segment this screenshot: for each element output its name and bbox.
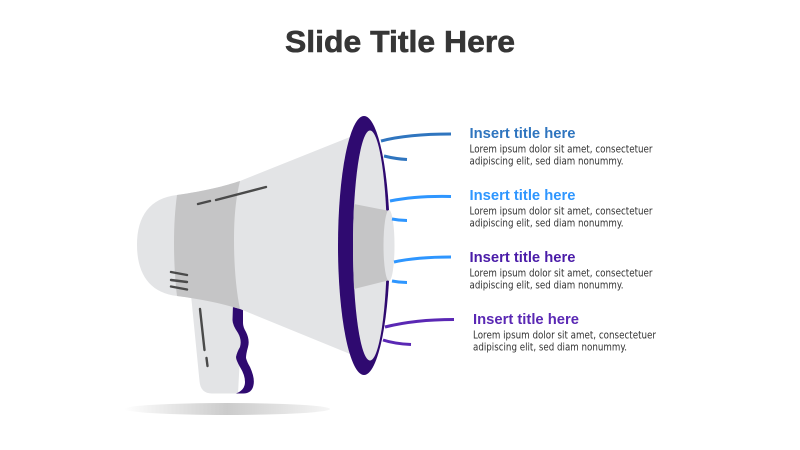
text block 1: Insert title here xyxy=(470,126,576,142)
body marks xyxy=(171,187,266,290)
text block 3: Insert title here xyxy=(470,250,576,266)
sound lines 4 xyxy=(383,320,454,344)
text block 2: Lorem ipsum dolor sit amet, consectetuer xyxy=(470,206,653,218)
text block 2: adipiscing elit, sed diam nonummy. xyxy=(470,218,624,230)
text block 3: Lorem ipsum dolor sit amet, consectetuer xyxy=(470,268,653,280)
text block 1 xyxy=(470,126,653,168)
text block 1: Lorem ipsum dolor sit amet, consectetuer xyxy=(470,144,653,156)
text block 2: Insert title here xyxy=(470,188,576,204)
text block 4: Lorem ipsum dolor sit amet, consectetuer xyxy=(473,330,657,342)
sound lines 2 xyxy=(390,196,451,220)
inner horn xyxy=(353,130,387,360)
title: Slide Title Here xyxy=(285,24,515,59)
handle grip edge xyxy=(232,305,254,394)
text block 3: adipiscing elit, sed diam nonummy. xyxy=(470,280,624,292)
text block 4: adipiscing elit, sed diam nonummy. xyxy=(473,342,627,354)
sound lines 3 xyxy=(392,257,451,282)
horn opening xyxy=(384,210,394,281)
inner cone xyxy=(353,204,390,289)
text block 4: Insert title here xyxy=(473,312,579,328)
text block 3 xyxy=(470,250,653,292)
horn body xyxy=(137,135,355,356)
text block 2 xyxy=(470,188,653,230)
purple rim xyxy=(338,116,390,375)
handle xyxy=(191,295,254,394)
grey band xyxy=(174,181,240,309)
handle marks xyxy=(200,309,208,366)
megaphone illustration xyxy=(137,116,394,394)
ground shadow xyxy=(124,403,330,415)
sound lines 1 xyxy=(381,134,451,160)
text block 4 xyxy=(473,312,657,354)
text block 1: adipiscing elit, sed diam nonummy. xyxy=(470,156,624,168)
